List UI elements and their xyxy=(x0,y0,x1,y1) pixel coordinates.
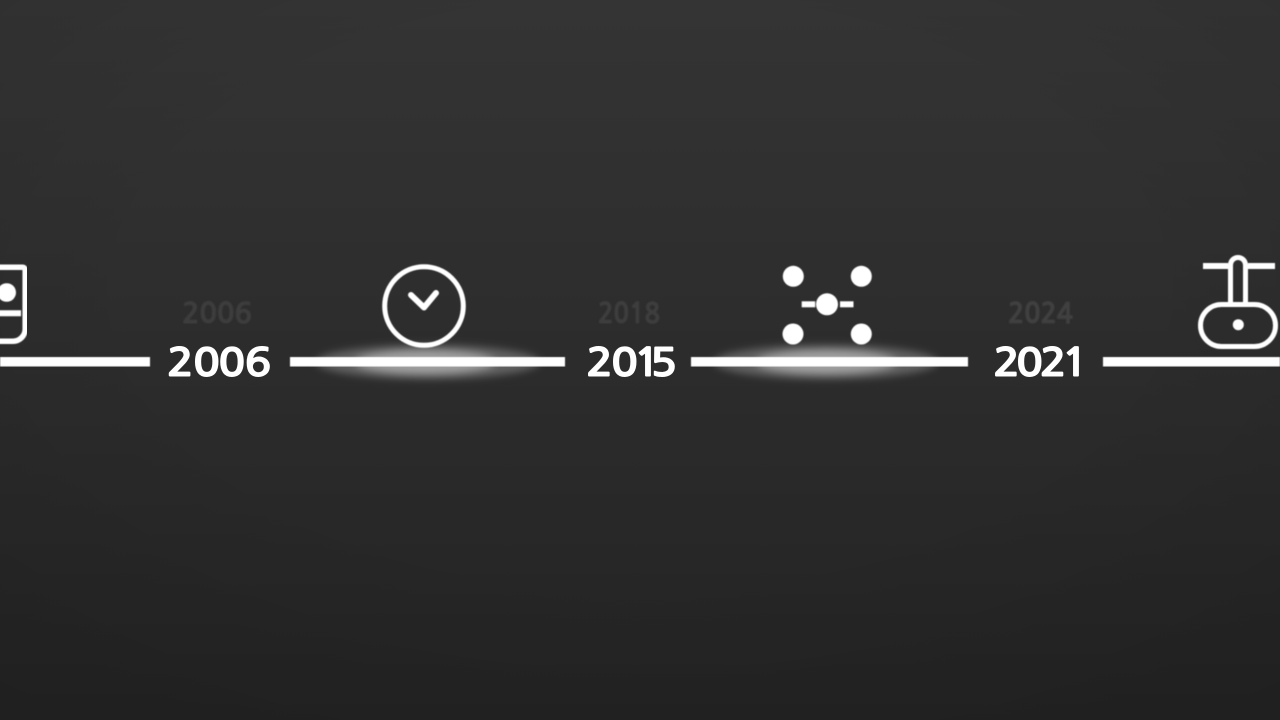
faint year 2018: 2018 xyxy=(598,300,660,328)
year 2021: 2021 xyxy=(993,344,1089,382)
faint year 2024: 2024 xyxy=(1008,300,1073,328)
timeline segment 1 xyxy=(0,357,150,366)
timeline segment 4 xyxy=(1103,357,1280,366)
icon: connected dots xyxy=(782,266,872,344)
glow under second segment xyxy=(316,345,540,379)
glow under third segment xyxy=(714,345,938,379)
timeline segment 3 xyxy=(691,357,968,366)
timeline segment 2 xyxy=(290,357,565,366)
icon: clock with check mark xyxy=(385,267,463,345)
faint year 2006: 2006 xyxy=(182,300,252,328)
year 2015: 2015 xyxy=(586,344,677,382)
year 2006: 2006 xyxy=(167,344,272,382)
icon: cropped card xyxy=(0,267,25,341)
icon: device with antenna xyxy=(1200,258,1276,346)
